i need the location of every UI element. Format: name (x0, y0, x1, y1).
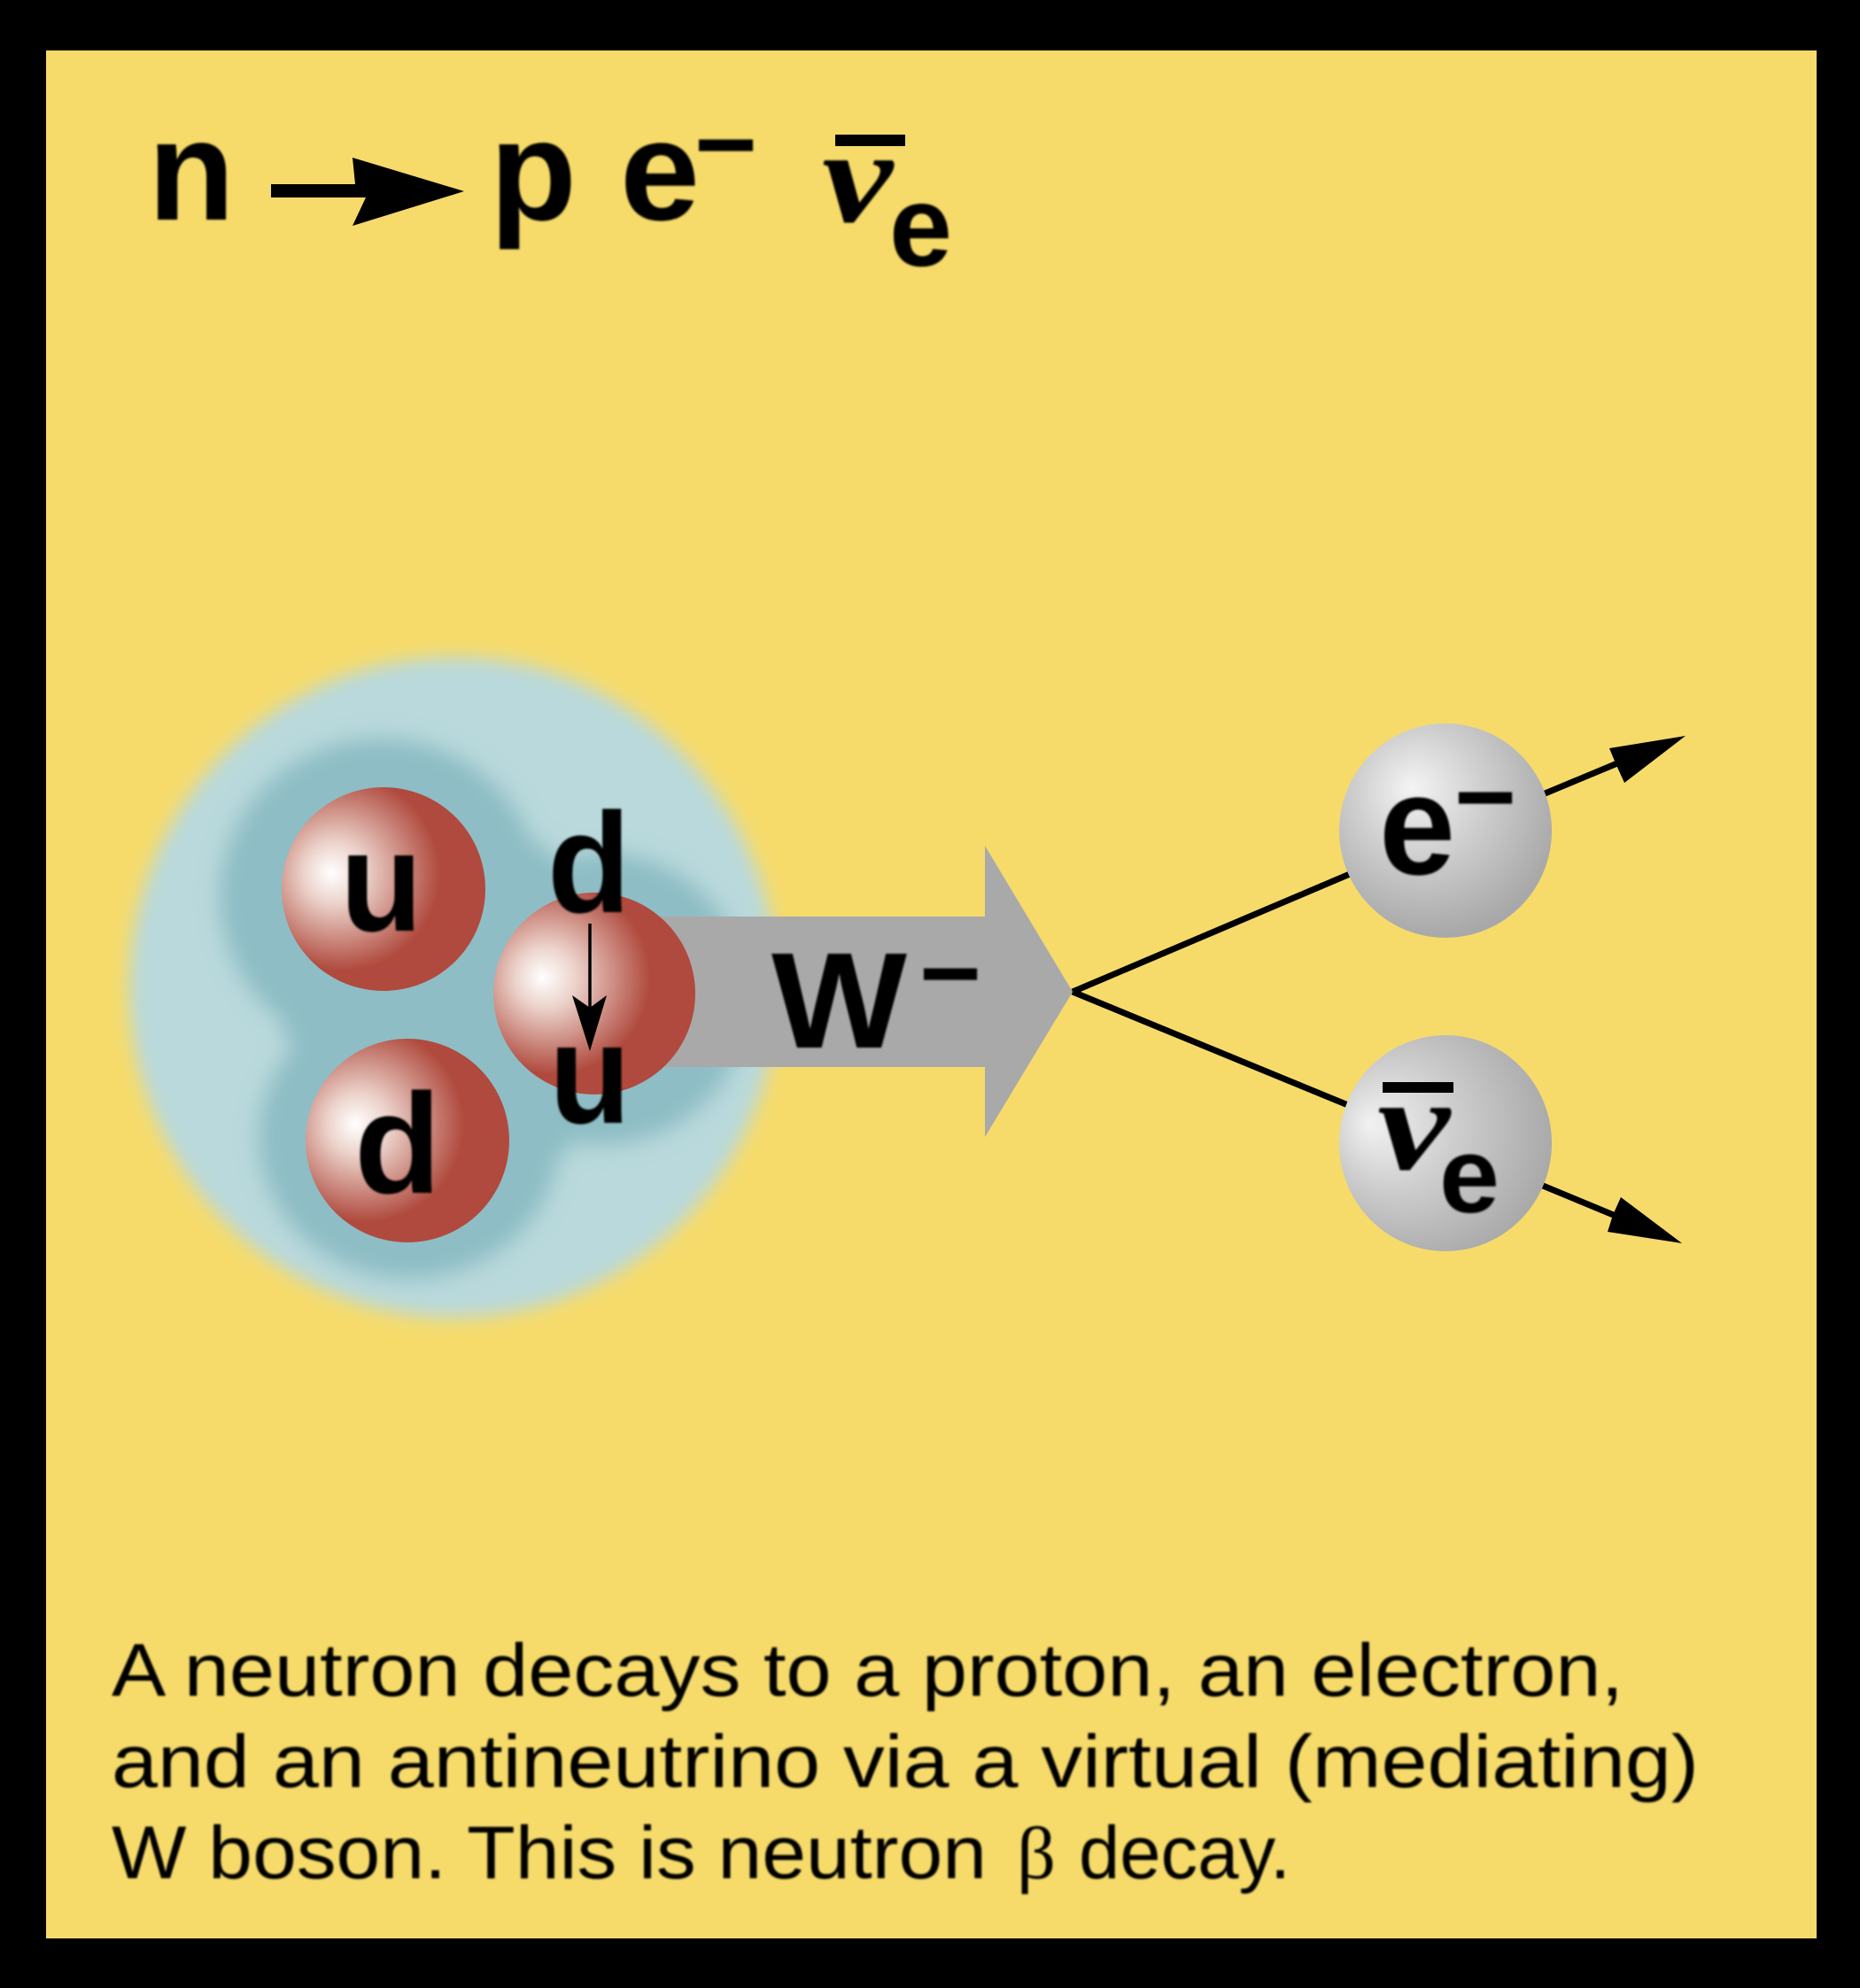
transforming quark sphere: d to u: d (547, 784, 631, 943)
caption text: and an antineutrino via a virtual (mediating) (112, 1720, 1699, 1803)
equation: neutron decays to proton, electron, antineutrino (148, 85, 952, 290)
antineutrino sphere: e (1439, 1115, 1500, 1235)
electron sphere: e (1379, 746, 1455, 905)
equation: neutron decays to proton, electron, antineutrino: ν (822, 104, 895, 251)
equation: neutron decays to proton, electron, antineutrino: n (148, 91, 235, 251)
equation: neutron decays to proton, electron, antineutrino: p (490, 91, 577, 251)
electron sphere (1339, 723, 1552, 938)
antineutrino path arrow (1073, 992, 1682, 1243)
W boson arrow: − (919, 914, 981, 1033)
W boson arrow (655, 846, 1073, 1137)
equation: neutron decays to proton, electron, antineutrino: − (694, 85, 757, 204)
down quark sphere (306, 1039, 509, 1242)
antineutrino sphere: ν (1377, 1051, 1452, 1198)
caption text: W boson. This is neutron (112, 1811, 987, 1894)
down quark sphere: d (354, 1064, 441, 1224)
electron sphere: − (1454, 738, 1516, 856)
caption text: decay. (1079, 1811, 1290, 1894)
up quark sphere: u (340, 802, 422, 962)
caption text: β (1017, 1813, 1056, 1895)
W boson arrow: W (771, 924, 908, 1077)
caption text: A neutron decays to a proton, an electron, (112, 1628, 1624, 1712)
electron path arrow (1073, 736, 1686, 992)
transforming quark sphere: d to u (493, 784, 695, 1154)
neutron cloud (129, 657, 778, 1318)
up quark sphere (282, 787, 485, 991)
equation: neutron decays to proton, electron, antineutrino: e (889, 161, 952, 290)
transforming quark sphere: d to u: u (549, 994, 631, 1154)
equation: neutron decays to proton, electron, antineutrino: e (620, 91, 700, 251)
antineutrino sphere (1339, 1035, 1552, 1251)
caption text (112, 1628, 1699, 1895)
